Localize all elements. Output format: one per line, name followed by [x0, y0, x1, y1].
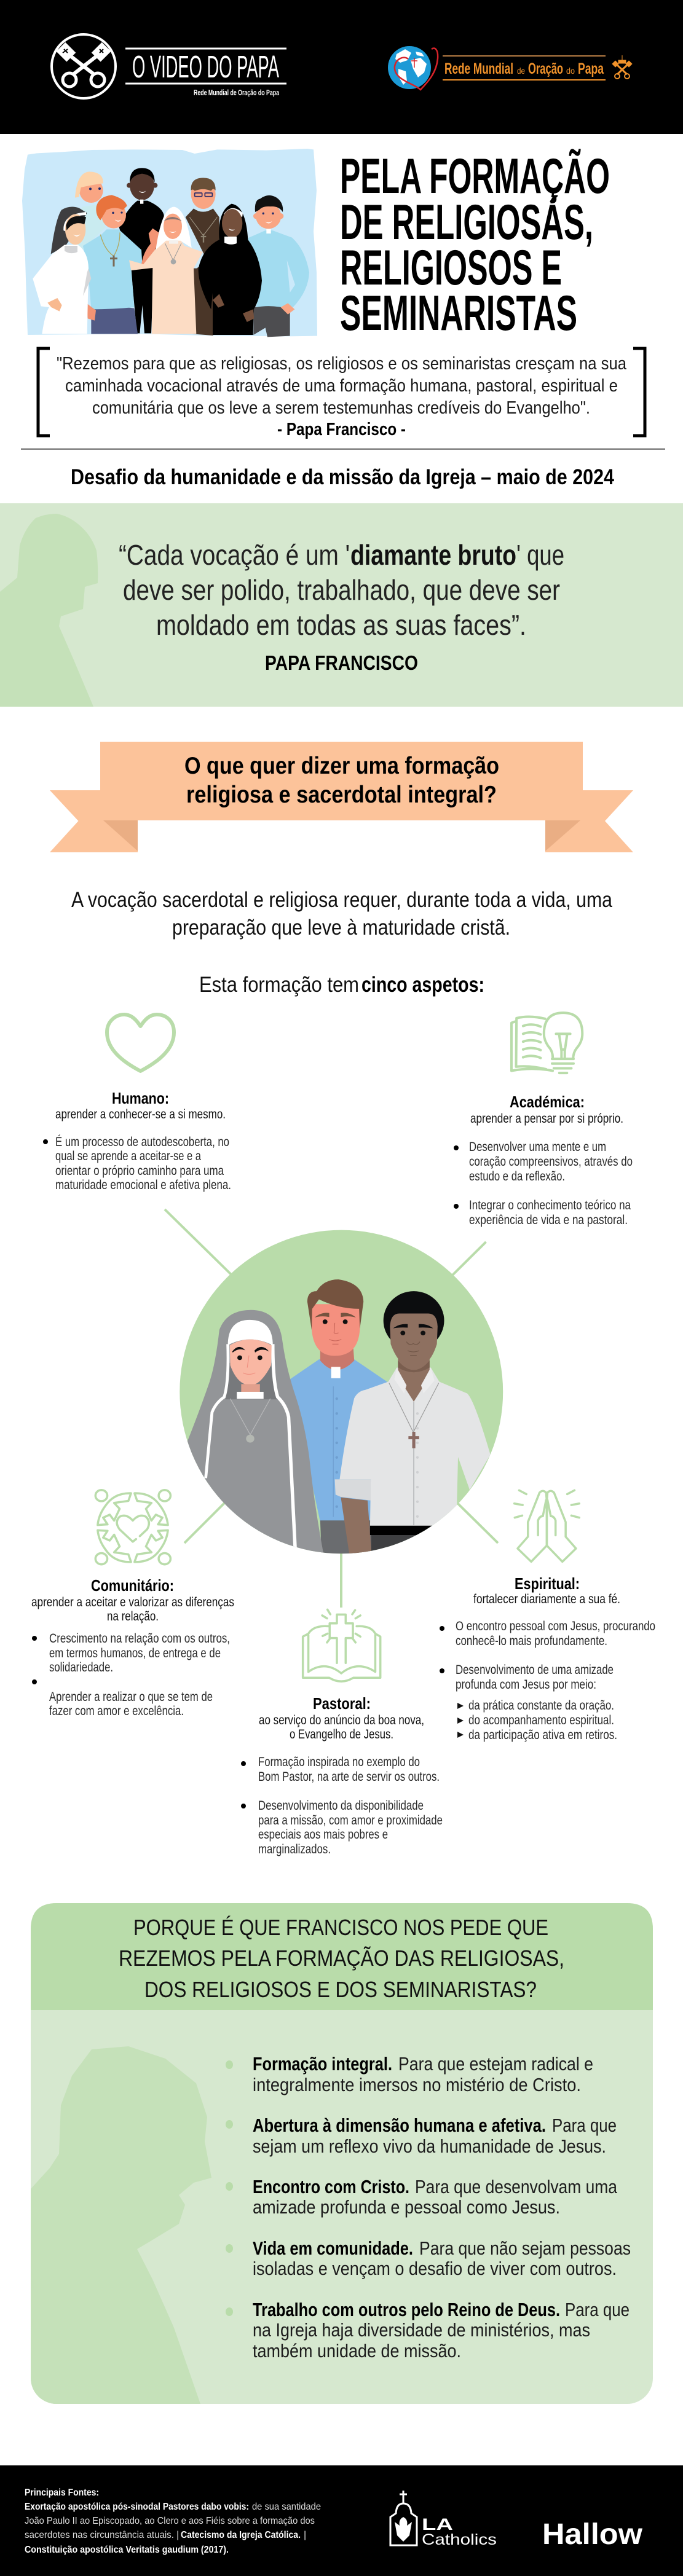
prayer intention with brackets: - Papa Francisco -	[277, 420, 406, 439]
reason 3: Para que desenvolvam uma	[415, 2176, 618, 2197]
logo: O Video do Papa: O VIDEO DO PAPA	[132, 49, 279, 84]
reason 4: Para que não sejam pessoas	[419, 2237, 631, 2259]
reason 2: sejam um reflexo vivo da humanidade de Jesus.	[253, 2135, 606, 2157]
reason 1: Formação integral.	[253, 2053, 392, 2075]
layman with cross	[335, 1291, 491, 1555]
sources text: Catecismo da Igreja Católica.	[181, 2530, 301, 2540]
central illustration: nun, priest, layman	[178, 1230, 503, 1556]
footer band	[0, 2465, 683, 2576]
aspect: Espiritual: conhecê-lo mais profundamente.	[456, 1634, 607, 1648]
prayer intention with brackets	[38, 348, 645, 439]
logo: Rede Mundial de Oração do Papa: Papa	[578, 60, 604, 77]
reason 3: Encontro com Cristo.	[253, 2176, 409, 2197]
connector lines	[165, 1209, 498, 1608]
aspect: Comunitário: fazer com amor e excelência.	[49, 1704, 184, 1718]
aspect: Pastoral: ao serviço do anúncio da boa nova,	[259, 1713, 424, 1727]
reason 3	[226, 2176, 618, 2218]
aspect: Académica: estudo e da reflexão.	[469, 1169, 565, 1184]
prayer intention with brackets: "Rezemos para que as religiosas, os religiosos e os seminaristas cresçam na sua	[57, 354, 627, 374]
aspect: Pastoral	[241, 1609, 443, 1856]
aspect: Académica	[454, 1013, 633, 1227]
quote text	[119, 539, 564, 641]
logo: LA Catholics: LA	[422, 2515, 453, 2534]
icon: praying hands	[515, 1490, 579, 1561]
aspect: Espiritual	[440, 1490, 655, 1742]
icon: heart	[107, 1015, 174, 1071]
logo: Rede Mundial de Oração do Papa: Oração	[528, 60, 563, 77]
sources text: Exortação apostólica pós-sinodal Pastores dabo vobis:	[25, 2502, 249, 2512]
logo: Rede Mundial de Oração do Papa	[388, 46, 633, 90]
five aspects heading: Esta formação tem	[199, 973, 359, 997]
aspect: Humano: orientar o próprio caminho para uma	[55, 1164, 224, 1178]
aspect: Académica: coração compreensivos, através do	[469, 1155, 633, 1169]
aspect: Pastoral: Bom Pastor, na arte de servir os outros.	[258, 1770, 440, 1784]
reason 3: amizade profunda e pessoal como Jesus.	[253, 2196, 560, 2218]
quote text: deve ser polido, trabalhado, que deve ser	[123, 574, 560, 606]
banner heading: O que quer dizer uma formação	[184, 753, 499, 779]
aspect: Espiritual: fortalecer diariamente a sua fé.	[473, 1592, 620, 1606]
quote text: ' que	[516, 539, 564, 571]
nun	[178, 1310, 324, 1556]
aspect: Humano: É um processo de autodescoberta, no	[55, 1135, 229, 1149]
aspect: Comunitário: Crescimento na relação com os outros,	[49, 1632, 230, 1646]
aspect: Humano: aprender a conhecer-se a si mesmo.	[55, 1107, 226, 1121]
reason 4: Vida em comunidade.	[253, 2237, 413, 2259]
aspect: Comunitário: solidariedade.	[49, 1660, 113, 1675]
reason 5	[226, 2299, 630, 2362]
reason 5: Para que	[565, 2299, 630, 2320]
panel heading: PORQUE É QUE FRANCISCO NOS PEDE QUE	[133, 1915, 548, 1940]
aspect: Humano: maturidade emocional e afetiva plena.	[55, 1178, 231, 1192]
reason 1	[226, 2053, 593, 2095]
panel: pope quote	[0, 503, 683, 707]
aspect: Comunitário: Comunitário:	[91, 1576, 174, 1595]
panel heading: REZEMOS PELA FORMAÇÃO DAS RELIGIOSAS,	[119, 1946, 564, 1971]
aspect: Espiritual: do acompanhamento espiritual.	[468, 1713, 614, 1727]
aspect: Pastoral: Desenvolvimento da disponibilidade	[258, 1799, 424, 1813]
reason 2	[226, 2115, 617, 2157]
pope silhouette	[0, 512, 98, 707]
aspect: Humano	[43, 1015, 231, 1192]
panel heading: DOS RELIGIOSOS E DOS SEMINARISTAS?	[144, 1977, 537, 2002]
reason 2: Para que	[552, 2115, 617, 2136]
sources text: Constituição apostólica Veritatis gaudium (2017).	[25, 2545, 229, 2555]
pope silhouette	[25, 2041, 211, 2404]
banner heading	[50, 742, 633, 852]
intro text	[71, 888, 612, 940]
header band	[0, 0, 683, 134]
figure: nun in white	[33, 206, 91, 334]
figure: monk with glasses	[186, 178, 219, 336]
logo: O Video do Papa: Rede Mundial de Oração do Papa	[194, 88, 280, 97]
reason 4	[226, 2237, 631, 2279]
reason 2: Abertura à dimensão humana e afetiva.	[253, 2115, 546, 2136]
reason 5: na Igreja haja diversidade de ministérios, mas	[253, 2319, 590, 2341]
prayer intention with brackets: caminhada vocacional através de uma formação humana, pastoral, espiritual e	[65, 376, 618, 396]
reason 1: Para que estejam radical e	[398, 2053, 593, 2075]
prayer intention with brackets: comunitária que os leve a serem testemunhas credíveis do Evangelho".	[92, 398, 590, 418]
reason 4: isoladas e vençam o desafio de viver com outros.	[253, 2258, 617, 2279]
sources text: de sua santidade	[252, 2502, 321, 2512]
intro text: A vocação sacerdotal e religiosa requer, durante toda a vida, uma	[71, 888, 612, 912]
figure: seminarian	[246, 195, 309, 337]
figure: blonde woman	[75, 171, 106, 250]
aspect: Pastoral: especiais aos mais pobres e	[258, 1828, 388, 1842]
quote text: diamante bruto	[350, 539, 516, 571]
aspect: Humano: Humano:	[112, 1089, 169, 1107]
sources text: João Paulo II ao Episcopado, ao Clero e aos Fiéis sobre a formação dos	[25, 2516, 315, 2526]
sources text: |	[304, 2530, 306, 2540]
icon: book and light bulb	[511, 1013, 582, 1073]
aspect: Académica: experiência de vida e na pastoral.	[469, 1213, 628, 1227]
aspect: Comunitário: na relação.	[107, 1609, 159, 1624]
aspect: Pastoral: marginalizados.	[258, 1842, 331, 1856]
panel: why Francis asks us to pray	[25, 1903, 653, 2404]
aspect: Académica: Integrar o conhecimento teórico na	[469, 1198, 631, 1212]
logo: Rede Mundial de Oração do Papa: de	[517, 66, 525, 76]
quote text: “Cada vocação é um '	[119, 539, 350, 571]
panel header	[31, 1903, 653, 2010]
aspect: Espiritual: da prática constante da oração.	[468, 1698, 614, 1713]
aspect: Espiritual: profunda com Jesus por meio:	[456, 1678, 596, 1692]
aspect: Comunitário: Aprender a realizar o que se tem de	[49, 1690, 213, 1704]
logo: O Video do Papa	[52, 34, 286, 98]
aspect: Académica: Desenvolver uma mente e um	[469, 1140, 606, 1154]
figure: black-clad priest	[119, 168, 164, 333]
aspect: Comunitário: em termos humanos, de entrega e de	[49, 1646, 221, 1660]
priest	[290, 1279, 387, 1556]
aspect: Espiritual: da participação ativa em retiros.	[468, 1728, 617, 1742]
aspect: Académica: aprender a pensar por si próprio.	[470, 1112, 623, 1126]
icon: community circle with heart	[95, 1490, 170, 1565]
icon: open book with cross	[303, 1609, 381, 1681]
logo: LA Catholics	[390, 2491, 497, 2548]
aspect: Académica: Académica:	[510, 1093, 585, 1111]
panel heading	[119, 1915, 564, 2002]
aspect: Comunitário	[31, 1490, 234, 1718]
figure: nun in cream	[129, 207, 203, 334]
sources text	[25, 2488, 321, 2555]
aspect: Espiritual: Desenvolvimento de uma amizade	[456, 1663, 614, 1677]
aspect: Pastoral: Formação inspirada no exemplo do	[258, 1755, 420, 1769]
quote text: moldado em todas as suas faces”.	[156, 609, 526, 641]
aspect: Espiritual: Espiritual:	[515, 1574, 580, 1593]
sources text: Principais Fontes:	[25, 2488, 99, 2498]
sources text: sacerdotes nas circunstância atuais. |	[25, 2530, 179, 2540]
quote attribution: PAPA FRANCISCO	[265, 651, 418, 674]
five aspects heading: cinco aspetos:	[361, 973, 484, 997]
figure: nun in black	[199, 204, 262, 335]
five aspects heading	[199, 973, 484, 997]
logo: Hallow: Hallow	[542, 2518, 643, 2551]
intro text: preparação que leve à maturidade cristã.	[172, 916, 510, 940]
reason 5: Trabalho com outros pelo Reino de Deus.	[253, 2299, 560, 2320]
logo: Rede Mundial de Oração do Papa: do	[566, 66, 575, 76]
reason 1: integralmente imersos no mistério de Cristo.	[253, 2074, 581, 2095]
reason 5: também unidade de missão.	[253, 2340, 461, 2362]
aspect: Humano: qual se aprende a aceitar-se e a	[55, 1149, 201, 1163]
logo: Rede Mundial de Oração do Papa: Rede Mundial	[444, 60, 513, 77]
aspect: Pastoral: o Evangelho de Jesus.	[290, 1727, 393, 1742]
illustration: group of religious people	[22, 149, 317, 337]
figure: red-haired man with cross	[83, 195, 162, 334]
monthly challenge heading: Desafio da humanidade e da missão da Igreja – maio de 2024	[71, 465, 614, 489]
banner heading: religiosa e sacerdotal integral?	[186, 782, 497, 808]
aspect: Comunitário: aprender a aceitar e valorizar as diferenças	[31, 1595, 234, 1609]
logo: LA Catholics: Catholics	[422, 2531, 497, 2548]
aspect: Pastoral: Pastoral:	[313, 1694, 371, 1713]
aspect: Pastoral: para a missão, com amor e proximidade	[258, 1813, 443, 1828]
title	[340, 148, 610, 341]
